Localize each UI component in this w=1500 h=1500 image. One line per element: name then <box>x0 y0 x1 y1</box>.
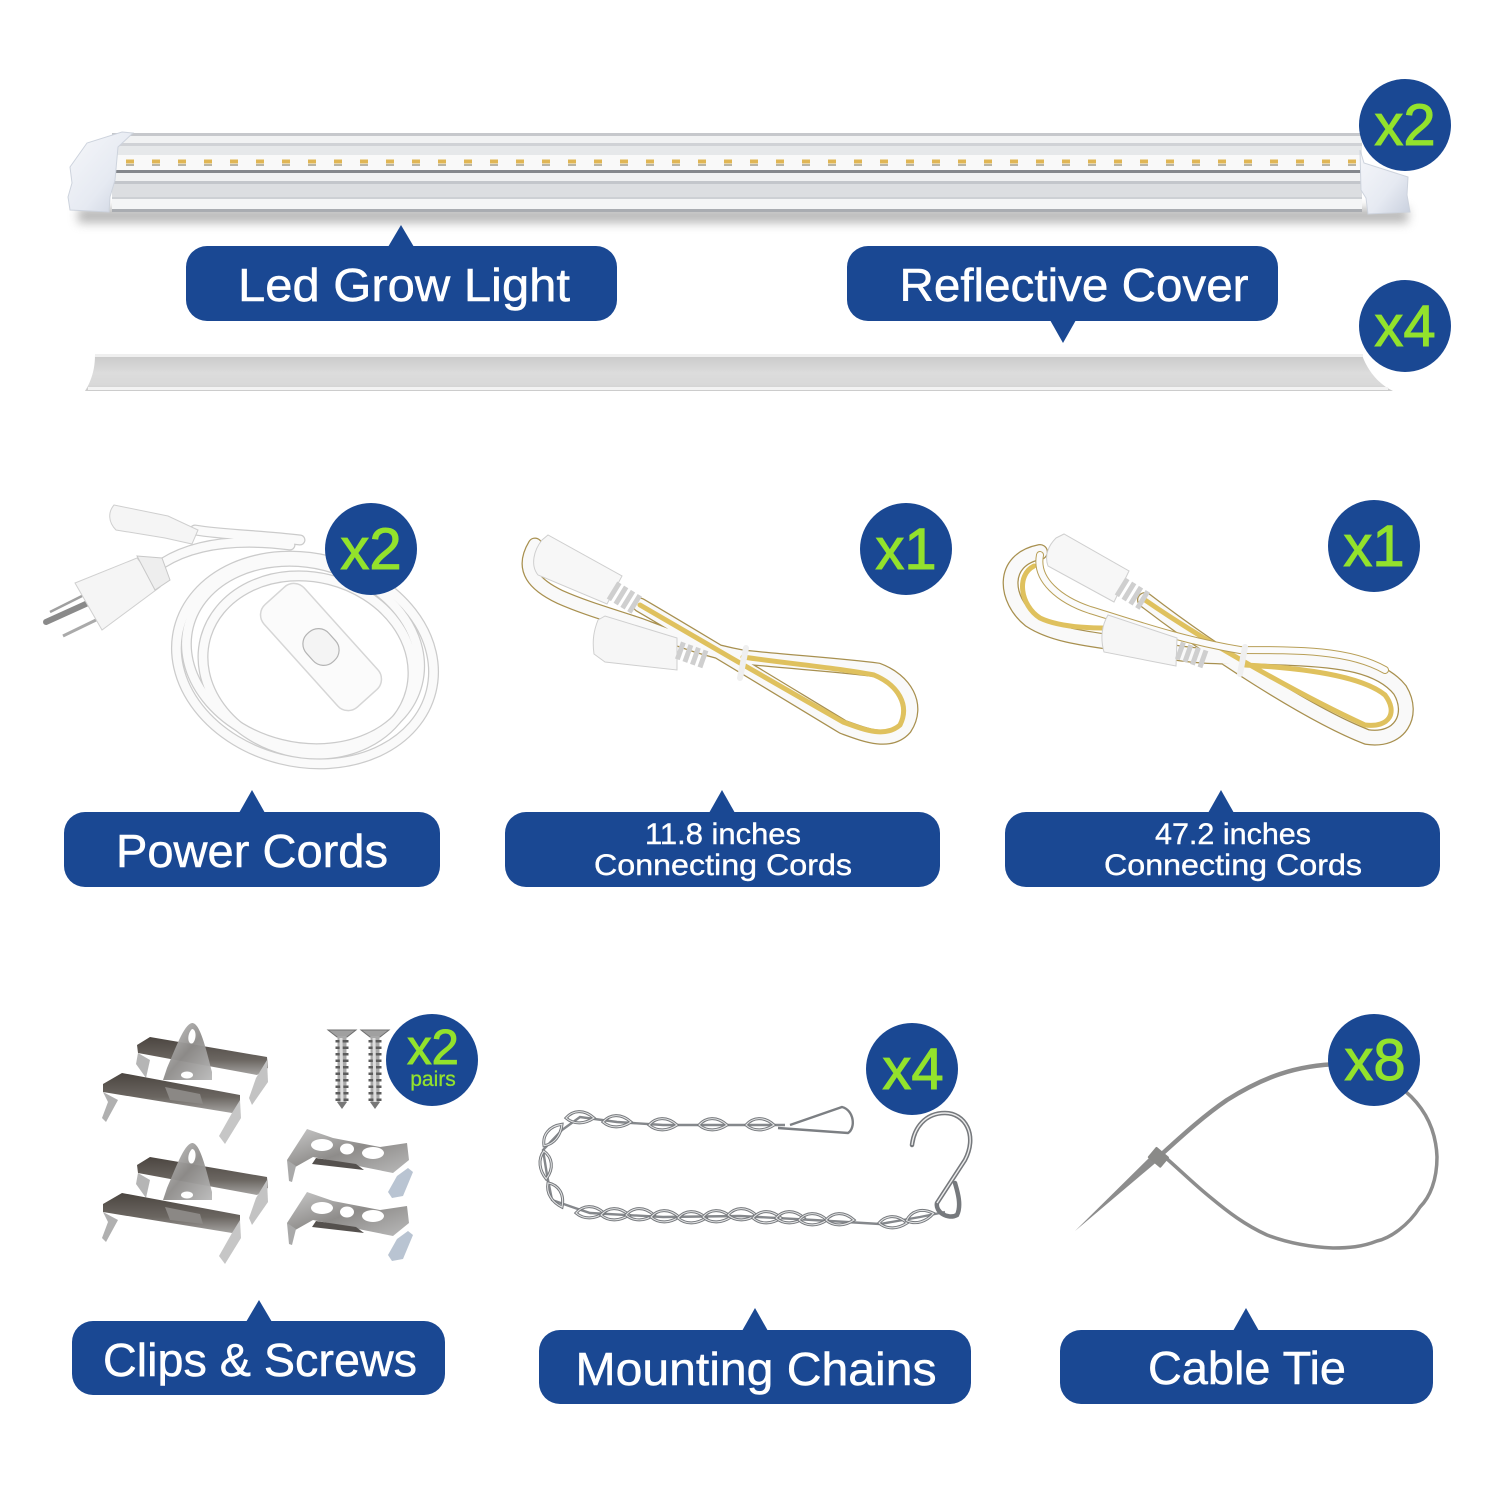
inline rocker switch <box>255 578 387 716</box>
reflector top edge <box>95 354 1363 357</box>
label: mounting chains <box>539 1308 971 1404</box>
quantity badge x2: x2 <box>340 517 402 582</box>
connector two <box>593 616 677 670</box>
strain relief one <box>1120 586 1146 602</box>
small clip one <box>287 1129 413 1198</box>
quantity badge x4: x4 <box>882 1037 944 1102</box>
strain relief one <box>612 590 638 606</box>
strain relief two <box>678 650 706 660</box>
label: clips and screws <box>72 1300 445 1395</box>
flat two-tone cable <box>1011 552 1406 738</box>
label: cable tie: Cable Tie <box>1148 1342 1346 1394</box>
screw two <box>361 1030 389 1109</box>
quantity badge x2 <box>325 503 417 595</box>
right end cap <box>1360 150 1410 214</box>
quantity badge x2: x2 <box>1374 93 1436 158</box>
panel: power cords <box>46 503 456 790</box>
large clip set one <box>102 1023 268 1144</box>
label: 11.8 inches connecting cords: Connecting Cords <box>594 849 852 882</box>
chain links <box>539 1112 945 1228</box>
label: 47.2 inches connecting cords <box>1005 790 1440 887</box>
cable band <box>740 648 746 678</box>
label: led grow light: Led Grow Light <box>238 259 570 311</box>
quantity badge x2 pairs <box>386 1014 478 1106</box>
quantity badge x2 <box>1359 79 1451 171</box>
cable band <box>1240 647 1245 674</box>
quantity badge x2 pairs: x2 <box>407 1021 459 1075</box>
label: 47.2 inches connecting cords: Connecting Cords <box>1104 849 1362 882</box>
strain relief two <box>1178 650 1206 660</box>
tie head <box>1147 1146 1169 1168</box>
led chips <box>126 160 1356 164</box>
label: reflective cover: Reflective Cover <box>900 259 1248 311</box>
panel: led grow light <box>68 79 1451 223</box>
label: mounting chains: Mounting Chains <box>576 1343 936 1395</box>
coiled white cable <box>154 530 456 790</box>
tie band lower <box>1166 1091 1437 1248</box>
s hook <box>912 1113 970 1217</box>
c7 connector <box>110 505 198 544</box>
label: reflective cover <box>847 246 1278 343</box>
panel: 47.2 inch connecting cord <box>1011 500 1420 738</box>
quantity badge x1: x1 <box>1343 514 1405 579</box>
plug with prongs <box>46 556 170 636</box>
connector two <box>1102 615 1177 666</box>
tie band upper <box>1163 1064 1340 1153</box>
quantity badge x4 <box>866 1023 958 1115</box>
snap clip <box>778 1107 853 1133</box>
flat two-tone cable <box>529 545 911 737</box>
panel: 11.8 inch connecting cord <box>529 503 952 737</box>
label: 11.8 inches connecting cords: 11.8 inches <box>645 818 801 851</box>
led tube body <box>112 133 1362 212</box>
label: clips and screws: Clips & Screws <box>103 1334 417 1386</box>
large clip set two <box>102 1143 268 1264</box>
small clip two <box>287 1192 413 1261</box>
quantity badge x1 <box>1328 500 1420 592</box>
panel: clips and screws <box>102 1014 478 1264</box>
quantity badge x1: x1 <box>875 517 937 582</box>
quantity badge x8 <box>1328 1014 1420 1106</box>
quantity badge x1 <box>860 503 952 595</box>
label: cable tie <box>1060 1308 1433 1404</box>
label: power cords <box>64 790 440 887</box>
panel: mounting chains <box>539 1023 970 1228</box>
quantity badge x8: x8 <box>1344 1028 1406 1093</box>
reflector bottom edge <box>88 387 1388 390</box>
quantity badge x4 <box>1359 280 1451 372</box>
reflector strip <box>85 355 1393 391</box>
label: 11.8 inches connecting cords <box>505 790 940 887</box>
tie tail <box>1075 1154 1159 1231</box>
screw one <box>328 1030 356 1109</box>
quantity badge x4: x4 <box>1374 294 1436 359</box>
label: 47.2 inches connecting cords: 47.2 inches <box>1155 818 1311 851</box>
led bar shadow <box>78 208 1408 223</box>
connector one <box>1047 534 1129 602</box>
panel: cable tie <box>1075 1014 1437 1248</box>
quantity badge x2 pairs: pairs <box>410 1068 456 1091</box>
label: power cords: Power Cords <box>116 825 388 877</box>
left end cap <box>68 132 133 212</box>
label: led grow light <box>186 225 617 321</box>
led chip shadow <box>126 164 1356 166</box>
panel: reflective cover <box>85 280 1451 391</box>
connector one <box>534 535 622 604</box>
